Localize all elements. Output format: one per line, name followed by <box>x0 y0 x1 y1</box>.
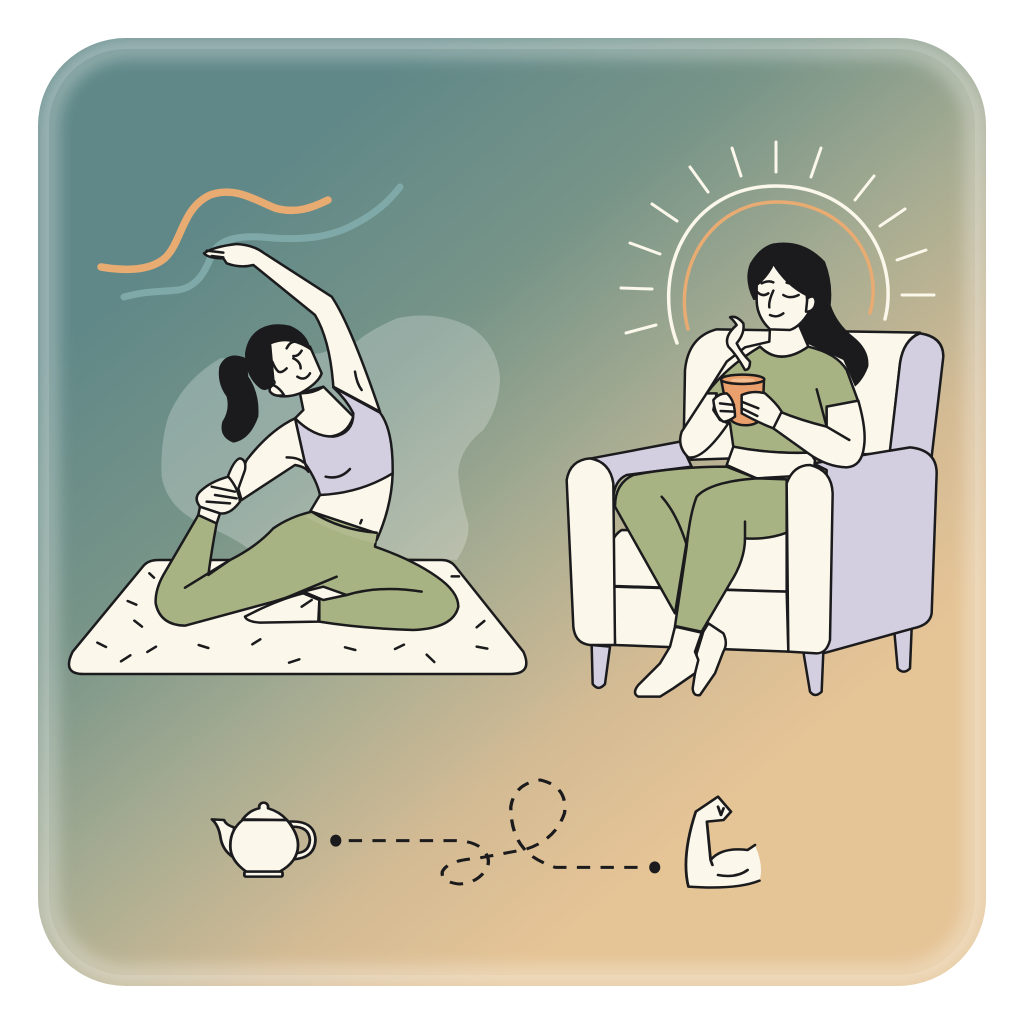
face <box>757 263 816 330</box>
neck <box>295 387 353 437</box>
green leggings <box>156 512 458 630</box>
seat cushion <box>608 530 787 592</box>
front foot <box>635 627 702 697</box>
dashed looping path <box>349 780 640 884</box>
neck <box>707 323 808 393</box>
decorative flowing ribbons above yoga figure <box>101 187 400 297</box>
navel <box>360 520 362 523</box>
seat base <box>613 587 788 652</box>
midriff <box>310 473 393 540</box>
hands around mug <box>713 392 782 428</box>
steam <box>727 317 750 370</box>
chair back <box>683 329 920 460</box>
back leg <box>615 467 757 613</box>
armchair scene <box>567 242 943 697</box>
yoga mat <box>69 560 526 674</box>
chair wing <box>890 333 943 457</box>
right armrest front <box>787 465 833 653</box>
front leg <box>675 478 787 632</box>
chair legs <box>592 628 912 695</box>
left armrest top <box>592 442 692 497</box>
head and face <box>245 324 324 396</box>
icon: teapot <box>212 803 315 877</box>
lower foot <box>245 577 422 623</box>
right armrest side <box>813 447 937 653</box>
soft background blob <box>161 316 500 560</box>
bent arm <box>237 418 308 500</box>
green t-shirt <box>707 347 858 453</box>
yoga scene <box>69 244 526 674</box>
midriff <box>727 447 815 478</box>
orange mug <box>721 375 764 425</box>
back foot <box>693 623 726 695</box>
lilac sports top <box>295 387 393 495</box>
left armrest front <box>567 458 615 645</box>
raised foot and hand holding it <box>197 458 245 523</box>
right arm <box>773 401 865 467</box>
start dot <box>330 835 341 847</box>
bottom journey row <box>212 780 761 888</box>
end dot <box>649 861 660 873</box>
left arm <box>680 393 728 458</box>
long hair <box>747 242 868 387</box>
halo arcs and sun rays <box>621 142 934 343</box>
raised arm <box>204 244 380 412</box>
thigh crease <box>741 522 749 538</box>
ponytail <box>219 356 259 443</box>
icon: flexed muscle arm <box>686 797 761 888</box>
